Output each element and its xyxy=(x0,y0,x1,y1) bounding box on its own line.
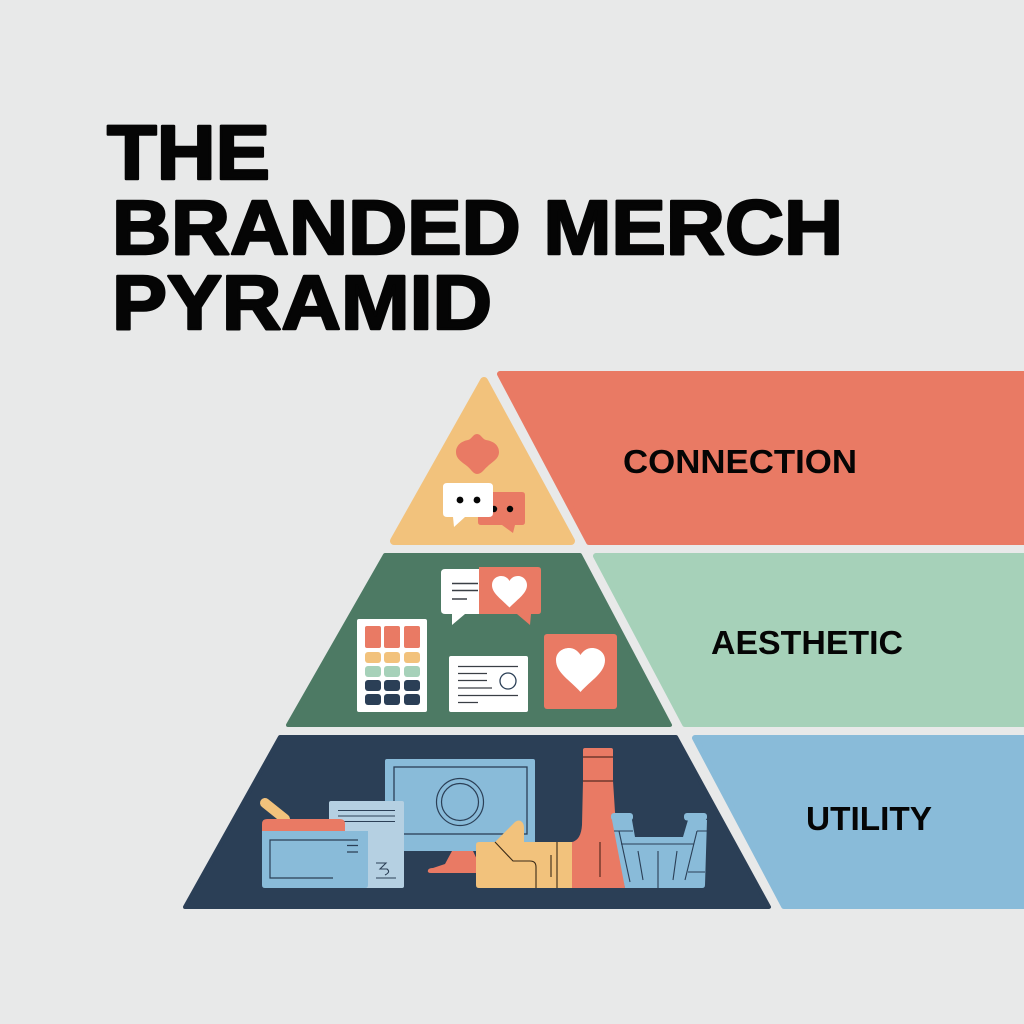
pyramid tier: middle trapezoid xyxy=(288,555,670,725)
panel: aesthetic tier xyxy=(288,555,670,725)
icon: paper document xyxy=(329,801,404,888)
icon: pencil xyxy=(265,803,285,819)
title: THE xyxy=(107,110,270,196)
icon: thumbs-up hand xyxy=(476,820,572,888)
icon: bottle xyxy=(572,748,625,888)
title: PYRAMID xyxy=(112,260,492,346)
panel: connection tier xyxy=(394,381,571,541)
icon: red chat bubble xyxy=(478,492,525,533)
band: utility xyxy=(695,738,1024,906)
icon: business card xyxy=(449,656,528,712)
icon: swatch grid card xyxy=(357,619,427,712)
icon: red blob xyxy=(456,434,499,474)
label: aesthetic: AESTHETIC xyxy=(711,625,903,662)
icon: red heart tile xyxy=(544,634,617,709)
icon: folder xyxy=(262,819,368,888)
icon: basket xyxy=(611,813,707,888)
icon: white chat bubble xyxy=(443,483,493,527)
pyramid tier: base trapezoid xyxy=(185,737,769,907)
label: connection: CONNECTION xyxy=(623,444,857,481)
panel: utility tier xyxy=(185,737,769,907)
band: aesthetic xyxy=(596,556,1024,724)
title xyxy=(107,110,843,346)
icon: red heart bubble xyxy=(479,567,541,625)
band: connection xyxy=(500,374,1024,542)
label: utility: UTILITY xyxy=(806,801,932,838)
icon: monitor xyxy=(385,759,535,873)
pyramid tier: top triangle xyxy=(394,381,571,541)
icon: white message bubble xyxy=(441,569,480,625)
title: BRANDED MERCH xyxy=(112,185,843,271)
